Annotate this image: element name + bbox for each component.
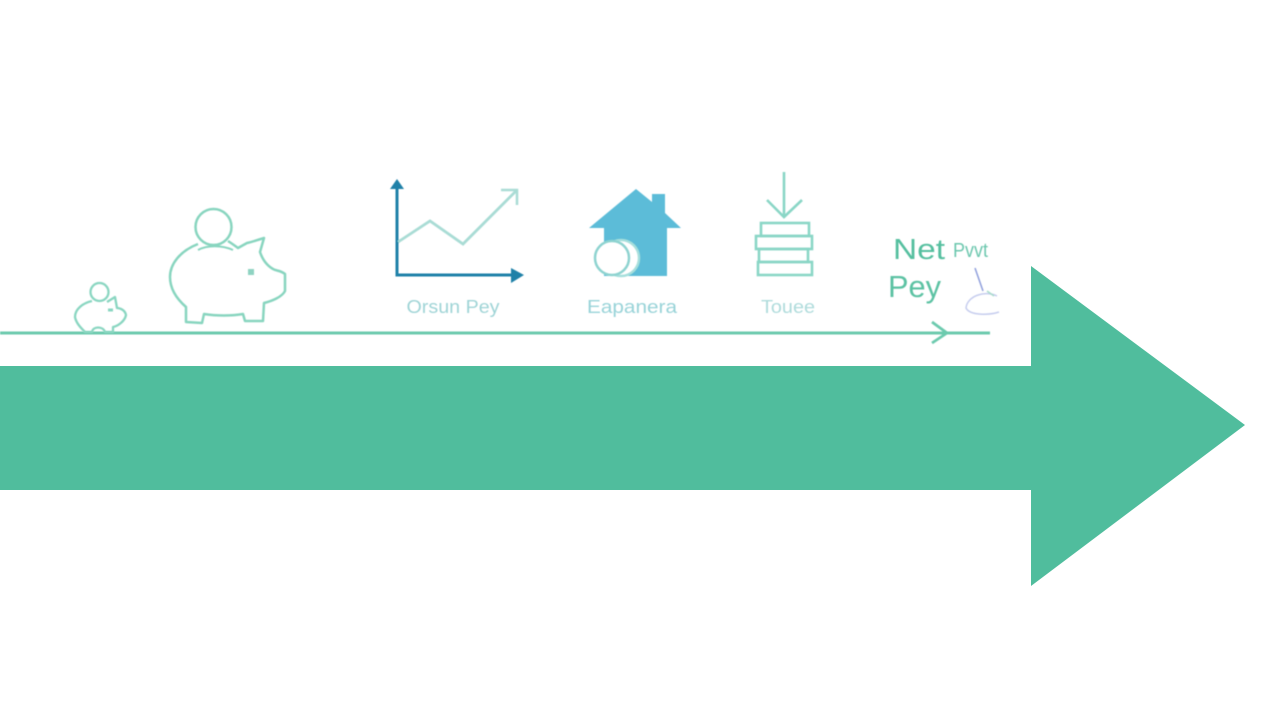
icon: down arrow onto stack: [756, 172, 812, 275]
label: Orsun Pey: Orsun Pey: [406, 297, 500, 317]
label: Taxes: Touee: [761, 297, 815, 317]
icon: large piggy bank: [170, 209, 285, 323]
icon: growth chart: [390, 179, 524, 283]
timeline arrow: [0, 322, 990, 343]
icon: small coin sketch: [966, 268, 999, 314]
heading: Net Pay: Pvvt: [953, 240, 988, 262]
heading: Net Pay: Net: [893, 234, 945, 266]
icon: house with coins: [589, 189, 681, 276]
heading: Net Pay: [888, 234, 988, 304]
large arrow: [0, 266, 1245, 586]
label: Expenses: Eapanera: [587, 297, 678, 317]
heading: Net Pay: Pey: [888, 269, 941, 304]
icon: small piggy bank: [75, 283, 126, 332]
